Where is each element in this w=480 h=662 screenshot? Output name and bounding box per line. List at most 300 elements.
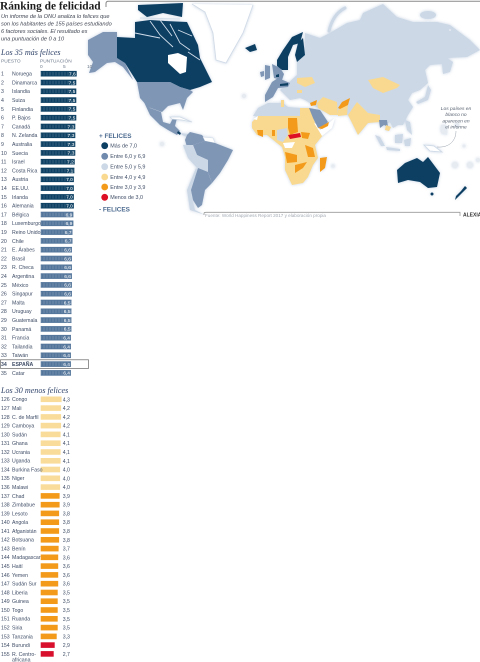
region: Africa bbox=[252, 108, 335, 185]
row: Burundi: 154 bbox=[1, 643, 10, 649]
region: Canada bbox=[117, 3, 212, 90]
row: Austria: 7,0 bbox=[66, 177, 73, 183]
row: Ghana: 131 bbox=[1, 441, 10, 447]
row: Catar: 35 bbox=[1, 371, 7, 377]
row: Burundi: Burundi bbox=[12, 643, 30, 649]
row: C. de Marfil bbox=[1, 414, 70, 421]
row: Brasil: 22 bbox=[1, 256, 7, 262]
row: Botsuana: Botsuana bbox=[12, 538, 34, 544]
row: Siria: 152 bbox=[1, 625, 10, 631]
row: Panamá: 30 bbox=[1, 327, 7, 333]
row: R. Checa: R. Checa bbox=[12, 265, 34, 271]
row: Siria: 3,5 bbox=[63, 626, 70, 632]
row: Uruguay: Uruguay bbox=[12, 309, 32, 315]
legend item: over 7: Más de 7,0 bbox=[110, 144, 137, 150]
row: Islandia bbox=[1, 88, 76, 95]
row: Congo bbox=[1, 396, 70, 403]
row: Bélgica: 17 bbox=[1, 212, 7, 218]
table header: 10 bbox=[87, 64, 93, 70]
row: Israel: Israel bbox=[12, 160, 25, 166]
row: Chad: 137 bbox=[1, 494, 10, 500]
row: P. Bajos bbox=[1, 115, 76, 122]
row: Malta: 6,5 bbox=[64, 300, 71, 306]
row: Yemen bbox=[1, 572, 70, 579]
row: Guatemala: Guatemala bbox=[12, 318, 37, 324]
region: Southeast Asia islands bbox=[160, 29, 480, 168]
row: Malawi: Malawi bbox=[12, 485, 28, 491]
row: Francia: 6,4 bbox=[63, 335, 70, 341]
row: Alemania: 7,0 bbox=[66, 203, 73, 209]
row: E. Árabes: 21 bbox=[1, 248, 7, 254]
row: Siria: Siria bbox=[12, 625, 22, 631]
legend item: 4 to 4.9: Entre 4,0 y 4,9 bbox=[110, 175, 145, 181]
annotation: blank countries: aparecen en bbox=[442, 118, 470, 124]
row: Haití: 3,6 bbox=[63, 564, 70, 570]
row: Francia bbox=[1, 335, 71, 342]
region: South America bbox=[183, 132, 233, 215]
row: Niger: 135 bbox=[1, 476, 10, 482]
row: Alemania: Alemania bbox=[12, 204, 34, 210]
row: P. Bajos: 6 bbox=[1, 116, 4, 122]
row: Irlanda bbox=[1, 194, 74, 201]
row: Camboya: 129 bbox=[1, 423, 10, 429]
row: Lesoto: 139 bbox=[1, 511, 10, 517]
top rule bbox=[106, 1, 480, 7]
row: Suecia: Suecia bbox=[12, 151, 28, 157]
row: Brasil bbox=[1, 256, 72, 262]
row: Tanzania: 3,3 bbox=[63, 634, 70, 640]
row: Australia: Australia bbox=[12, 142, 32, 148]
row: Lesoto: Lesoto bbox=[12, 511, 28, 517]
title: Ránking de felicidad bbox=[0, 1, 101, 13]
row: Yemen: 3,6 bbox=[63, 573, 70, 579]
row: Uganda bbox=[1, 458, 70, 465]
region: Asia and Russia bbox=[280, 4, 480, 128]
region: Siberian islands bbox=[420, 11, 436, 19]
legend item: 3 to 3.9: Entre 3,0 y 3,9 bbox=[110, 185, 145, 191]
row: Ucrania: 132 bbox=[1, 450, 10, 456]
row: Panamá bbox=[1, 326, 72, 333]
map: world happiness by country bbox=[88, 3, 480, 215]
row: Canadá: 7 bbox=[1, 124, 4, 130]
row: Taiwán: 6,4 bbox=[63, 353, 70, 359]
row: EE.UU. bbox=[1, 185, 74, 192]
list: 35 happiest countries bbox=[0, 71, 88, 377]
row: Malawi: 136 bbox=[1, 485, 10, 491]
heading: top 35: Los 35 más felices bbox=[0, 48, 61, 57]
row: N. Zelanda: 7,3 bbox=[67, 133, 75, 139]
row: Chile: 20 bbox=[1, 239, 7, 245]
footer rule bbox=[204, 212, 460, 216]
row: Chad: 3,9 bbox=[63, 494, 70, 500]
region: Alaska bbox=[88, 32, 133, 80]
row: Uganda: 4,1 bbox=[63, 459, 70, 465]
row: Australia: 9 bbox=[1, 142, 4, 148]
heading: bottom 30: Los 30 menos felices bbox=[0, 386, 68, 395]
row: Zimbabue: Zimbabue bbox=[12, 503, 35, 509]
row: Liberia bbox=[1, 590, 70, 596]
row: Togo: 3,5 bbox=[63, 608, 70, 614]
row: Austria: 13 bbox=[1, 177, 7, 183]
row: Burkina Faso bbox=[1, 467, 70, 474]
row: Luxemburgo: Luxemburgo bbox=[12, 221, 41, 227]
row: E. Árabes bbox=[1, 247, 72, 254]
row: Uruguay: 6,5 bbox=[64, 309, 71, 315]
row: Finlandia: Finlandia bbox=[12, 107, 33, 113]
row: Taiwán: Taiwán bbox=[12, 353, 28, 359]
row: México bbox=[1, 282, 72, 289]
row: Botsuana bbox=[1, 537, 70, 544]
row: Ucrania: 4,1 bbox=[63, 450, 70, 456]
row: Irlanda: Irlanda bbox=[12, 195, 28, 201]
row: R. Centroafricana: R. Centro- bbox=[12, 652, 36, 658]
region: United States and Mexico bbox=[137, 82, 193, 137]
row: Finlandia: 7,5 bbox=[68, 107, 76, 113]
row: Francia: Francia bbox=[12, 336, 29, 342]
row: Lesoto bbox=[1, 511, 70, 517]
row: Singapur: Singapur bbox=[12, 292, 33, 298]
annotation: blank countries: blanco no bbox=[445, 112, 467, 118]
table header: 0 bbox=[40, 64, 43, 70]
row: Bélgica: Bélgica bbox=[12, 212, 29, 218]
row: Tailandia: 32 bbox=[1, 344, 7, 350]
row: Brasil: Brasil bbox=[12, 256, 25, 262]
row: Burundi bbox=[1, 642, 70, 649]
legend item: 6 to 6.9: Entre 6,0 y 6,9 bbox=[110, 154, 145, 160]
row: Costa Rica bbox=[1, 168, 74, 174]
row: Tanzania bbox=[1, 634, 70, 640]
row: Mali: 4,2 bbox=[63, 406, 70, 412]
row: Finlandia bbox=[1, 106, 76, 113]
row: Camboya: Camboya bbox=[12, 423, 34, 429]
region: Greenland bbox=[192, 4, 253, 63]
row: Angola: 3,8 bbox=[63, 520, 70, 526]
row: Uganda: 133 bbox=[1, 459, 10, 465]
region: Caribbean bbox=[170, 117, 192, 122]
row: Australia: 7,3 bbox=[67, 142, 75, 148]
intro text: Un informe de la ONU analiza lo felices que bbox=[1, 14, 110, 20]
row: Haití: Haití bbox=[12, 564, 23, 570]
row: Burkina Faso: 4,0 bbox=[63, 468, 70, 474]
row: Islandia: 7,5 bbox=[68, 89, 76, 95]
row: Canadá: 7,3 bbox=[67, 124, 75, 130]
row: México: 25 bbox=[1, 283, 7, 289]
row: Dinamarca: 2 bbox=[1, 80, 4, 86]
annotation: blank countries: el informe bbox=[445, 124, 467, 130]
row: N. Zelanda: 8 bbox=[1, 133, 4, 139]
row: Madagascar: 3,6 bbox=[63, 555, 70, 561]
row: Sudán: 130 bbox=[1, 432, 10, 438]
row: EE.UU.: 14 bbox=[1, 186, 7, 192]
row: Malta: 27 bbox=[1, 300, 7, 306]
row: Benín bbox=[1, 546, 70, 553]
legend bbox=[99, 133, 145, 213]
row: Argentina bbox=[1, 273, 72, 280]
row: Catar: Catar bbox=[12, 371, 25, 377]
row: Suiza bbox=[1, 97, 76, 104]
row: Chad: Chad bbox=[12, 494, 25, 500]
row: Ruanda: 151 bbox=[1, 617, 10, 623]
row: España highlighted: ESPAÑA bbox=[12, 361, 33, 368]
row: Afganistán: 141 bbox=[1, 529, 10, 535]
row: Chile: Chile bbox=[12, 239, 24, 245]
row: Taiwán: 33 bbox=[1, 353, 7, 359]
row: Sudán Sur: 3,6 bbox=[63, 582, 70, 588]
row: Madagascar bbox=[1, 554, 70, 561]
row: Islandia: Islandia bbox=[12, 89, 30, 95]
row: Israel: 11 bbox=[1, 160, 6, 166]
row: Togo: 150 bbox=[1, 608, 10, 614]
intro text: una puntuación de 0 a 10 bbox=[1, 36, 65, 42]
row: Liberia: 3,5 bbox=[63, 591, 70, 597]
row: Tanzania: Tanzania bbox=[12, 634, 33, 640]
row: Tailandia: 6,4 bbox=[63, 344, 70, 350]
row: Israel: 7,2 bbox=[67, 159, 74, 165]
legend item: under 3: Menos de 3,0 bbox=[110, 195, 143, 201]
row: Noruega: Noruega bbox=[12, 72, 32, 78]
row: Suecia: 7,3 bbox=[67, 151, 75, 157]
intro text bbox=[1, 14, 112, 42]
row: EE.UU.: 7,0 bbox=[66, 186, 73, 192]
row: Tanzania: 153 bbox=[1, 634, 10, 640]
row: Reino Unido: Reino Unido bbox=[12, 230, 41, 236]
row: Ucrania bbox=[1, 449, 70, 456]
row: Costa Rica: Costa Rica bbox=[12, 168, 37, 174]
region: Tasmania bbox=[430, 192, 434, 196]
row: Noruega bbox=[1, 71, 77, 78]
row: Mali: 127 bbox=[1, 406, 10, 412]
row: Mali: Mali bbox=[12, 406, 22, 412]
row: Haití bbox=[1, 563, 70, 570]
row: Malawi bbox=[1, 484, 70, 491]
row: Chile: 6,7 bbox=[65, 239, 72, 245]
row: Reino Unido: 6,7 bbox=[65, 230, 72, 236]
row: Yemen: Yemen bbox=[12, 573, 28, 579]
row: Austria: Austria bbox=[12, 177, 28, 183]
row: Reino Unido bbox=[1, 229, 72, 236]
row: Uruguay: 28 bbox=[1, 309, 7, 315]
row: Ruanda bbox=[1, 616, 70, 623]
row: Suiza: Suiza bbox=[12, 98, 25, 104]
row: Singapur: 6,6 bbox=[64, 291, 71, 297]
row: Camboya bbox=[1, 423, 70, 430]
row: Suecia bbox=[1, 150, 75, 157]
row: N. Zelanda: N. Zelanda bbox=[12, 133, 37, 139]
region: Japan and Korea bbox=[416, 85, 431, 104]
row: Zimbabue: 3,9 bbox=[63, 503, 70, 509]
row: Alemania bbox=[1, 203, 74, 210]
row: Panamá: Panamá bbox=[12, 327, 31, 333]
row: Noruega: 1 bbox=[1, 72, 4, 78]
row: Irlanda: 15 bbox=[1, 195, 7, 201]
table header: PUESTO bbox=[1, 58, 21, 64]
legend heading: less happy: - FELICES bbox=[99, 206, 131, 213]
row: Sudán bbox=[1, 432, 70, 438]
region: Europe bbox=[245, 32, 315, 102]
row: Angola: 140 bbox=[1, 520, 10, 526]
row: Luxemburgo: 6,9 bbox=[66, 221, 73, 227]
row: España highlighted: 34 bbox=[1, 362, 7, 368]
row: Camboya: 4,2 bbox=[63, 424, 70, 430]
row: Sudán Sur: 147 bbox=[1, 582, 10, 588]
row: R. Centroafricana bbox=[1, 651, 70, 662]
row: Malta bbox=[1, 300, 72, 306]
row: Mali bbox=[1, 405, 70, 412]
row: P. Bajos: P. Bajos bbox=[12, 116, 31, 122]
row: Singapur bbox=[1, 291, 72, 298]
row: España highlighted bbox=[0, 360, 88, 368]
row: Catar: 6,4 bbox=[63, 371, 70, 377]
row: Madagascar: 144 bbox=[1, 555, 10, 561]
row: R. Checa: 23 bbox=[1, 265, 7, 271]
row: Sudán: Sudán bbox=[12, 432, 27, 438]
row: Noruega: 7,6 bbox=[69, 72, 76, 78]
row: Chad bbox=[1, 493, 70, 500]
row: Haití: 145 bbox=[1, 564, 10, 570]
row: Zimbabue bbox=[1, 502, 70, 509]
row: Tailandia bbox=[1, 344, 71, 350]
row: Guatemala: 29 bbox=[1, 318, 7, 324]
row: Afganistán: Afganistán bbox=[12, 529, 37, 535]
row: Tailandia: Tailandia bbox=[12, 344, 33, 350]
row: Suiza: 7,5 bbox=[68, 98, 76, 104]
region: Australia bbox=[397, 157, 440, 188]
row: Madagascar: Madagascar bbox=[12, 555, 41, 561]
row: EE.UU.: EE.UU. bbox=[12, 186, 29, 192]
table header bbox=[1, 58, 93, 70]
row: Suiza: 4 bbox=[1, 98, 4, 104]
table header: 5 bbox=[63, 64, 66, 70]
row: Yemen: 146 bbox=[1, 573, 10, 579]
row: Dinamarca bbox=[1, 80, 76, 86]
row: Congo: 126 bbox=[1, 397, 10, 403]
row: Burundi: 2,9 bbox=[63, 643, 70, 649]
row: Niger bbox=[1, 476, 70, 482]
arrow: annotation leader bbox=[437, 131, 456, 147]
row: Ghana bbox=[1, 440, 70, 447]
row: R. Centroafricana: 155 bbox=[1, 652, 10, 658]
row: Bélgica bbox=[1, 212, 73, 218]
row: R. Checa bbox=[1, 264, 72, 271]
row: Afganistán: 3,8 bbox=[63, 529, 70, 535]
row: Ghana: Ghana bbox=[12, 441, 28, 447]
row: Israel bbox=[1, 159, 75, 166]
row: N. Zelanda bbox=[1, 132, 75, 139]
row: Luxemburgo: 18 bbox=[1, 221, 7, 227]
row: Lesoto: 3,8 bbox=[63, 511, 70, 517]
row: Burkina Faso: 134 bbox=[1, 467, 10, 473]
source note: Fuente: World Happiness Report 2017 y elaboración propia bbox=[205, 213, 326, 218]
list: 30 least happy countries bbox=[1, 396, 70, 662]
row: Niger: 4,0 bbox=[63, 476, 70, 482]
row: Ruanda: 3,5 bbox=[63, 617, 70, 623]
row: México: 6,6 bbox=[64, 283, 71, 289]
row: Francia: 31 bbox=[1, 336, 7, 342]
row: Benín: 143 bbox=[1, 546, 10, 552]
row: Togo: Togo bbox=[12, 608, 23, 614]
row: Botsuana: 142 bbox=[1, 538, 10, 544]
row: Irlanda: 7,0 bbox=[66, 195, 73, 201]
row: Panamá: 6,5 bbox=[64, 327, 71, 333]
row: Sudán: 4,1 bbox=[63, 432, 70, 438]
intro text: 6 factores sociales. El resultado es bbox=[1, 29, 88, 35]
row: Guinea: 3,5 bbox=[63, 599, 70, 605]
row: Liberia: 148 bbox=[1, 590, 10, 596]
row: Niger: Niger bbox=[12, 476, 25, 482]
row: Liberia: Liberia bbox=[12, 590, 28, 596]
row: Australia bbox=[1, 141, 75, 148]
row: Guinea: 149 bbox=[1, 599, 10, 605]
row: R. Centroafricana: 2,7 bbox=[63, 652, 70, 658]
row: Malawi: 4,0 bbox=[63, 485, 70, 491]
row: Singapur: 26 bbox=[1, 292, 7, 298]
row: Reino Unido: 19 bbox=[1, 230, 7, 236]
region: North Africa bbox=[253, 100, 300, 116]
row: Guinea bbox=[1, 598, 70, 605]
intro text: son los habitantes de 155 países estudiando bbox=[1, 22, 112, 28]
row: Finlandia: 5 bbox=[1, 107, 4, 113]
row: Uganda: Uganda bbox=[12, 459, 30, 465]
row: Canadá: Canadá bbox=[12, 124, 30, 130]
row: Benín: Benín bbox=[12, 546, 26, 552]
row: Sudán Sur: Sudán Sur bbox=[12, 582, 37, 588]
row: Catar bbox=[1, 370, 71, 377]
row: Guatemala bbox=[1, 317, 72, 324]
row: Austria bbox=[1, 176, 74, 183]
row: Angola: Angola bbox=[12, 520, 28, 526]
region: Middle East and South Asia bbox=[309, 77, 400, 135]
row: Bélgica: 6,9 bbox=[66, 212, 73, 218]
row: Benín: 3,7 bbox=[63, 547, 70, 553]
row: Dinamarca: Dinamarca bbox=[12, 80, 37, 86]
row: Malta: Malta bbox=[12, 300, 25, 306]
row: Argentina: 24 bbox=[1, 274, 7, 280]
legend item: 5 to 5.9: Entre 5,0 y 5,9 bbox=[110, 165, 145, 171]
row: Angola bbox=[1, 519, 70, 526]
row: Ruanda: Ruanda bbox=[12, 617, 30, 623]
row: Costa Rica: 12 bbox=[1, 168, 7, 174]
row: Canadá bbox=[1, 124, 75, 130]
row: Argentina: 6,6 bbox=[64, 274, 71, 280]
row: España highlighted: 6,4 bbox=[63, 362, 70, 368]
row: E. Árabes: 6,6 bbox=[64, 247, 71, 253]
row: R. Checa: 6,6 bbox=[64, 265, 71, 271]
row: Siria bbox=[1, 625, 70, 632]
table header: PUNTUACIÓN bbox=[40, 58, 72, 64]
row: Burkina Faso: Burkina Faso bbox=[12, 467, 43, 473]
row: Luxemburgo bbox=[1, 220, 73, 227]
row: C. de Marfil: 4,2 bbox=[63, 415, 70, 421]
row: C. de Marfil: C. de Marfil bbox=[12, 415, 39, 421]
row: Argentina: Argentina bbox=[12, 274, 34, 280]
row: Sudán Sur bbox=[1, 581, 70, 588]
row: Dinamarca: 7,5 bbox=[68, 80, 76, 86]
row: Afganistán bbox=[1, 528, 70, 535]
row: Congo: 4,3 bbox=[63, 397, 70, 403]
region: New Zealand bbox=[455, 186, 467, 200]
row: Guatemala: 6,5 bbox=[64, 318, 71, 324]
row: P. Bajos: 7,5 bbox=[68, 116, 76, 122]
row: Chile bbox=[1, 238, 72, 245]
row: Suecia: 10 bbox=[1, 151, 7, 157]
row: Uruguay bbox=[1, 308, 72, 315]
row: Guinea: Guinea bbox=[12, 599, 29, 605]
legend heading: more happy: + FELICES bbox=[99, 133, 132, 140]
row: Botsuana: 3,8 bbox=[63, 538, 70, 544]
annotation: blank countries bbox=[441, 106, 472, 130]
row: C. de Marfil: 128 bbox=[1, 415, 10, 421]
row: Togo bbox=[1, 607, 70, 614]
